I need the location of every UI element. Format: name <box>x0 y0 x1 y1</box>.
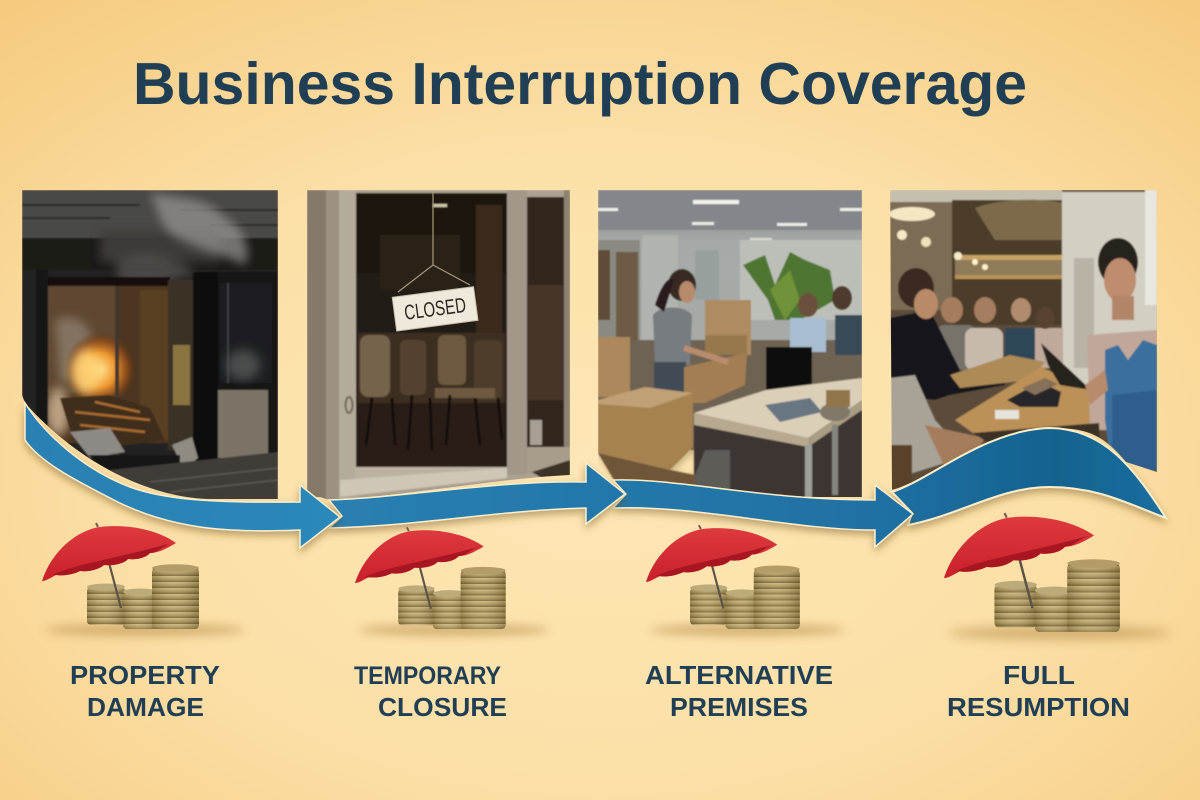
label: property damage: DAMAGE <box>87 692 204 722</box>
title: Business Interruption Coverage <box>133 51 1027 117</box>
label: alternative premises: PREMISES <box>670 692 808 722</box>
label: temporary closure: TEMPORARY <box>354 662 501 690</box>
label: full resumption <box>947 660 1130 722</box>
label: property damage: PROPERTY <box>70 660 220 690</box>
photo: full resumption cafe <box>889 190 1157 490</box>
label: full resumption: RESUMPTION <box>947 692 1130 722</box>
label: property damage <box>70 660 220 722</box>
label: temporary closure: CLOSURE <box>378 692 507 722</box>
label: alternative premises <box>645 660 833 722</box>
arrow 3 <box>613 480 913 547</box>
icon: umbrella over coins, alternative premises <box>646 525 845 636</box>
arrow 1 <box>25 403 340 548</box>
label: full resumption: FULL <box>1003 660 1075 690</box>
arrow 2 <box>329 463 625 528</box>
closed sign <box>392 192 478 331</box>
icon: umbrella over coins, temporary closure <box>355 527 550 636</box>
photo: alternative premises office <box>598 190 862 500</box>
photo: fire-damaged storefront <box>22 190 278 500</box>
icon: umbrella over coins, property damage <box>42 523 245 636</box>
closed sign: CLOSED <box>403 294 467 325</box>
photo: closed shop door <box>307 190 570 500</box>
icon: umbrella over coins, full resumption <box>944 513 1171 640</box>
label: temporary closure <box>354 662 507 722</box>
label: alternative premises: ALTERNATIVE <box>645 660 833 690</box>
arrow 4: full resumption wave <box>892 428 1166 525</box>
